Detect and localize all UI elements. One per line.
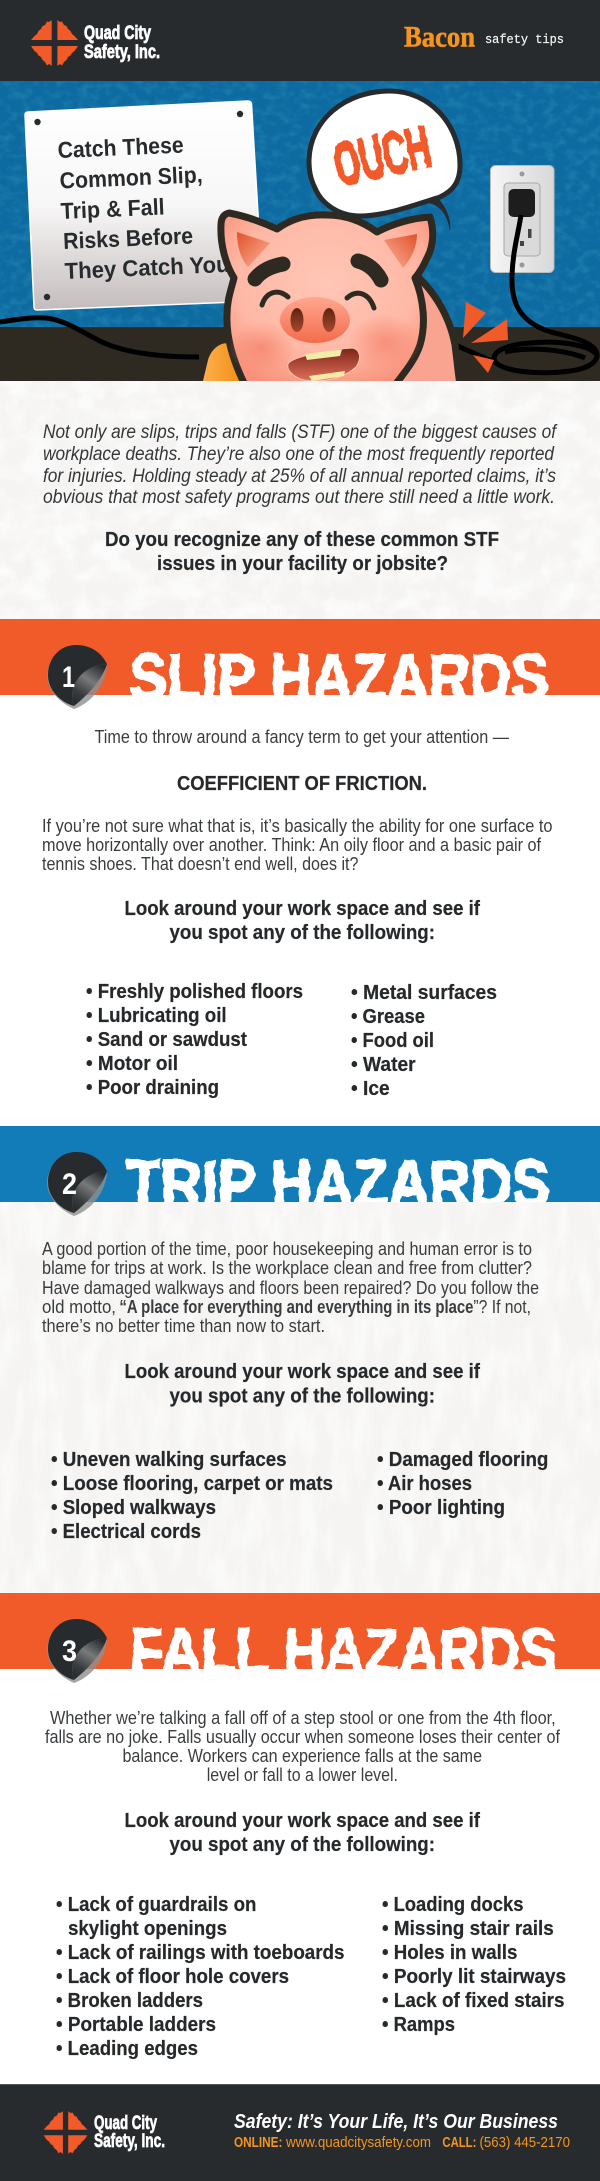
pig body bbox=[402, 276, 459, 381]
icon: orange cross emblem bbox=[44, 2111, 87, 2154]
footer contact details: (563) 445-2170 bbox=[480, 2135, 570, 2151]
bubble text: OUCH: OUCH bbox=[328, 113, 437, 199]
checklist heading: Look around your work space and see if bbox=[124, 1361, 480, 1383]
series title: Bacon safety tips: safety tips bbox=[485, 32, 564, 47]
panel: trip hazards bbox=[0, 1126, 600, 1593]
panel: slip hazards bbox=[0, 619, 600, 1126]
trip paragraph: blame for trips at work. Is the workplace clean and free from clutter? bbox=[42, 1258, 532, 1278]
trip paragraph: Have damaged walkways and floors been repaired? Do you follow the bbox=[42, 1278, 539, 1298]
checklist heading: you spot any of the following: bbox=[170, 1386, 435, 1408]
series title: Bacon safety tips bbox=[404, 20, 564, 54]
series title: Bacon safety tips: Bacon bbox=[404, 20, 475, 54]
list: left column: • Sand or sawdust bbox=[86, 1029, 247, 1051]
list: left column: • Freshly polished floors bbox=[86, 981, 303, 1003]
list: left column: • Lack of floor hole covers bbox=[56, 1966, 289, 1988]
intro paragraph bbox=[43, 422, 558, 508]
panel: introduction bbox=[0, 381, 600, 619]
fall paragraph: Whether we’re talking a fall off of a step stool or one from the 4th floor, bbox=[50, 1708, 556, 1728]
intro question: issues in your facility or jobsite? bbox=[157, 553, 448, 575]
sign text: Common Slip, bbox=[59, 161, 203, 193]
eyebrows bbox=[255, 261, 381, 280]
floor bbox=[0, 327, 600, 381]
list: right column bbox=[351, 982, 497, 1100]
checklist heading: Look around your work space and see if bbox=[124, 1810, 480, 1832]
list: right column: • Poor lighting bbox=[377, 1497, 505, 1519]
section banner bbox=[0, 1593, 600, 1688]
footer bbox=[0, 2084, 600, 2181]
intro question: Do you recognize any of these common STF bbox=[105, 529, 499, 551]
pig head bbox=[221, 213, 433, 385]
list: left column: • Lack of railings with toeboards bbox=[56, 1942, 344, 1964]
list: right column: • Water bbox=[351, 1054, 416, 1076]
footer logo bbox=[44, 2111, 165, 2154]
list: right column: • Ice bbox=[351, 1078, 390, 1100]
list: left column: • Lack of guardrails on bbox=[56, 1894, 256, 1916]
icon: orange cross emblem bbox=[31, 20, 78, 66]
hard hat bbox=[203, 343, 240, 381]
list: right column: • Missing stair rails bbox=[382, 1918, 554, 1940]
trip paragraph: there’s no better time than now to start. bbox=[42, 1316, 325, 1336]
checklist heading: Look around your work space and see if bbox=[124, 898, 480, 920]
list: right column: • Holes in walls bbox=[382, 1942, 517, 1964]
number badge 2 bbox=[47, 1152, 107, 1216]
logo: Quad City Safety bbox=[31, 20, 160, 66]
intro paragraph: workplace deaths. They’re also one of the most frequently reported bbox=[43, 444, 555, 465]
list: left column: • Poor draining bbox=[86, 1077, 219, 1099]
list: right column: • Damaged flooring bbox=[377, 1449, 548, 1471]
slip paragraph: If you’re not sure what that is, it’s basically the ability for one surface to bbox=[42, 816, 552, 836]
footer contact details: ONLINE: bbox=[234, 2135, 282, 2151]
checklist heading: you spot any of the following: bbox=[170, 922, 435, 944]
fall paragraph: balance. Workers can experience falls at the same bbox=[122, 1746, 482, 1766]
section banner bbox=[0, 1126, 600, 1220]
company name: Quad City bbox=[94, 2113, 157, 2134]
list: right column: • Ramps bbox=[382, 2014, 455, 2036]
list: left column: • Sloped walkways bbox=[51, 1497, 216, 1519]
list: left column: • Lubricating oil bbox=[86, 1005, 227, 1027]
company name: Quad City bbox=[84, 23, 151, 44]
intro paragraph: Not only are slips, trips and falls (STF) one of the biggest causes of bbox=[43, 422, 558, 443]
lead-in text: Time to throw around a fancy term to get your attention — bbox=[94, 727, 509, 747]
footer contact details: CALL: bbox=[442, 2135, 476, 2151]
footer slogan: Safety: It’s Your Life, It’s Our Business bbox=[234, 2111, 558, 2133]
eyes bbox=[262, 292, 374, 308]
list: left column bbox=[51, 1449, 333, 1543]
number badge 3: 3 bbox=[62, 1635, 77, 1668]
list: left column: • Electrical cords bbox=[51, 1521, 201, 1543]
pig bbox=[221, 213, 460, 385]
fall paragraph: level or fall to a lower level. bbox=[207, 1765, 398, 1785]
sign text bbox=[57, 132, 230, 284]
company name bbox=[84, 23, 160, 63]
list: left column: • Portable ladders bbox=[56, 2014, 216, 2036]
footer contact details: www.quadcitysafety.com bbox=[285, 2135, 431, 2151]
slip paragraph: tennis shoes. That doesn’t end well, does it? bbox=[42, 854, 358, 874]
checklist heading bbox=[124, 1810, 480, 1856]
sign text: Trip & Fall bbox=[60, 193, 165, 224]
list: left column: • Loose flooring, carpet or mats bbox=[51, 1473, 333, 1495]
number badge 3 bbox=[47, 1619, 107, 1683]
list: left column: skylight openings bbox=[68, 1918, 227, 1940]
list: left column bbox=[86, 981, 303, 1099]
impact marks bbox=[463, 302, 508, 373]
intro paragraph: obvious that most safety programs out there still need a little work. bbox=[43, 487, 555, 508]
list: right column: • Loading docks bbox=[382, 1894, 524, 1916]
hero illustration bbox=[0, 81, 600, 385]
number badge 2: 2 bbox=[62, 1168, 77, 1201]
ears bbox=[237, 232, 417, 268]
list: left column: • Uneven walking surfaces bbox=[51, 1449, 287, 1471]
list: right column: • Poorly lit stairways bbox=[382, 1966, 566, 1988]
number badge 1: 1 bbox=[62, 661, 75, 694]
list: left column: • Broken ladders bbox=[56, 1990, 203, 2012]
sign text: Catch These bbox=[57, 132, 184, 163]
list: left column: • Motor oil bbox=[86, 1053, 178, 1075]
wall sign bbox=[25, 101, 263, 310]
list: left column bbox=[56, 1894, 344, 2060]
snout bbox=[280, 297, 350, 343]
intro paragraph: for injuries. Holding steady at 25% of all annual reported claims, it’s bbox=[43, 466, 556, 487]
company name: Safety, Inc. bbox=[84, 42, 160, 63]
list: right column bbox=[377, 1449, 548, 1519]
company name bbox=[94, 2113, 165, 2152]
sign text: Risks Before bbox=[63, 222, 194, 254]
list: right column: • Grease bbox=[351, 1006, 425, 1028]
list: right column: • Metal surfaces bbox=[351, 982, 497, 1004]
trip paragraph: A good portion of the time, poor housekeeping and human error is to bbox=[42, 1239, 532, 1259]
slip paragraph bbox=[42, 816, 552, 874]
checklist heading bbox=[124, 1361, 480, 1408]
key term: COEFFICIENT OF FRICTION. bbox=[177, 773, 427, 795]
fall paragraph bbox=[45, 1708, 561, 1785]
speech bubble bbox=[309, 91, 460, 232]
cheeks bbox=[230, 319, 419, 366]
list: right column: • Air hoses bbox=[377, 1473, 472, 1495]
mouth bbox=[288, 348, 360, 381]
panel: fall hazards bbox=[0, 1593, 600, 2084]
footer contact details bbox=[234, 2135, 570, 2151]
list: right column: • Food oil bbox=[351, 1030, 434, 1052]
section banner bbox=[0, 619, 600, 714]
header bar bbox=[0, 0, 600, 81]
floor cord bbox=[0, 318, 199, 357]
list: left column: • Leading edges bbox=[56, 2038, 198, 2060]
wall outlet and plug bbox=[490, 166, 554, 272]
sign text: They Catch You bbox=[64, 251, 230, 284]
slip paragraph: move horizontally over another. Think: An oily floor and a basic pair of bbox=[42, 835, 542, 855]
blue wall bbox=[0, 81, 600, 327]
trip paragraph: old motto, bbox=[42, 1297, 116, 1317]
number badge 1 bbox=[47, 645, 107, 709]
power cord bbox=[453, 215, 597, 373]
list: right column: • Lack of fixed stairs bbox=[382, 1990, 564, 2012]
checklist heading bbox=[124, 898, 480, 944]
checklist heading: you spot any of the following: bbox=[170, 1834, 435, 1856]
company name: Safety, Inc. bbox=[94, 2131, 165, 2152]
intro question bbox=[105, 529, 499, 575]
trip paragraph: ”? If not, bbox=[473, 1297, 531, 1317]
trip paragraph bbox=[42, 1239, 539, 1336]
list: right column bbox=[382, 1894, 566, 2036]
trip paragraph: “A place for everything and everything in its place bbox=[119, 1297, 473, 1317]
